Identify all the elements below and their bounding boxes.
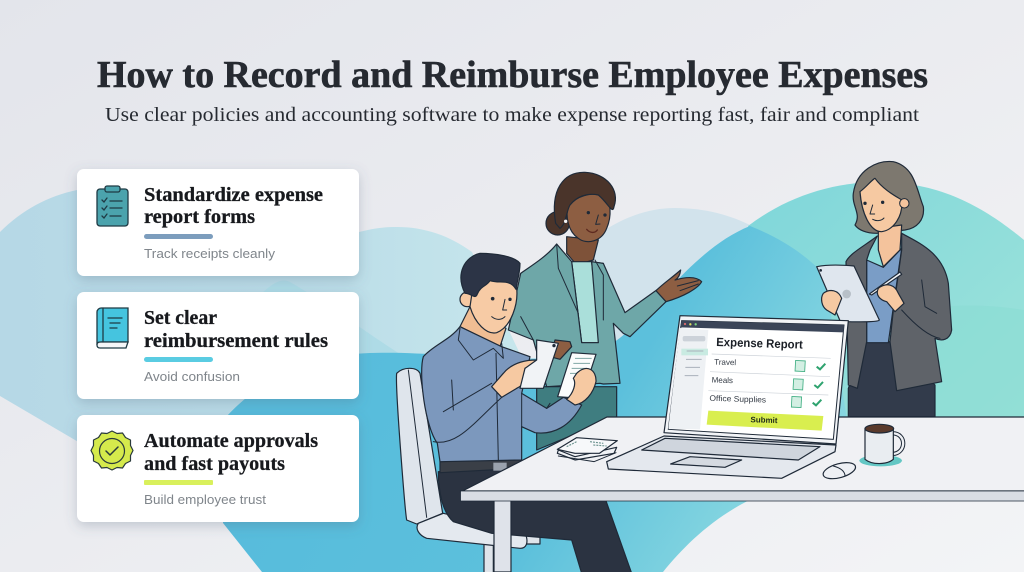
subtitle: Use clear policies and accounting software to make expense reporting fast, fair and compliant xyxy=(105,104,919,126)
panel: reimbursement rules xyxy=(77,292,359,399)
accent bar xyxy=(144,234,213,239)
caption: Build employee trust xyxy=(144,492,266,507)
panel: standardize forms xyxy=(77,169,359,276)
illustration: table xyxy=(460,417,1024,572)
laptop screen text: Expense Report xyxy=(716,335,803,352)
illustration: laptop: Submit xyxy=(750,415,778,425)
heading: Standardize expense xyxy=(144,184,323,206)
illustration: chair xyxy=(396,368,540,572)
accent bar xyxy=(144,357,213,362)
panel: automate approvals: and fast payouts xyxy=(144,453,285,475)
heading: Automate approvals xyxy=(144,430,318,452)
illustration: laptop xyxy=(607,316,848,478)
icon: book xyxy=(97,308,128,348)
caption: Avoid confusion xyxy=(144,369,240,384)
icon: mouse xyxy=(821,460,857,482)
title: How to Record and Reimburse Employee Expenses xyxy=(97,54,928,96)
laptop screen text: Meals xyxy=(712,375,733,385)
icon: receipt stack xyxy=(557,438,617,462)
panel: reimbursement rules: reimbursement rules xyxy=(144,330,328,352)
panel: standardize forms: report forms xyxy=(144,206,255,228)
accent bar xyxy=(144,480,213,485)
illustration: standing woman in grey jacket xyxy=(817,161,952,417)
icon: clipboard xyxy=(97,186,128,226)
icon: coffee mug xyxy=(859,424,903,466)
panel: automate approvals xyxy=(77,415,359,522)
laptop screen text: Office Supplies xyxy=(709,394,766,405)
icon: badge xyxy=(91,431,133,470)
heading: Set clear xyxy=(144,307,217,329)
caption: Track receipts cleanly xyxy=(144,246,276,261)
illustration: standing woman in teal jacket xyxy=(508,172,702,450)
laptop screen text xyxy=(709,335,803,406)
illustration: seated man xyxy=(422,253,632,572)
laptop screen text: Travel xyxy=(714,358,737,367)
